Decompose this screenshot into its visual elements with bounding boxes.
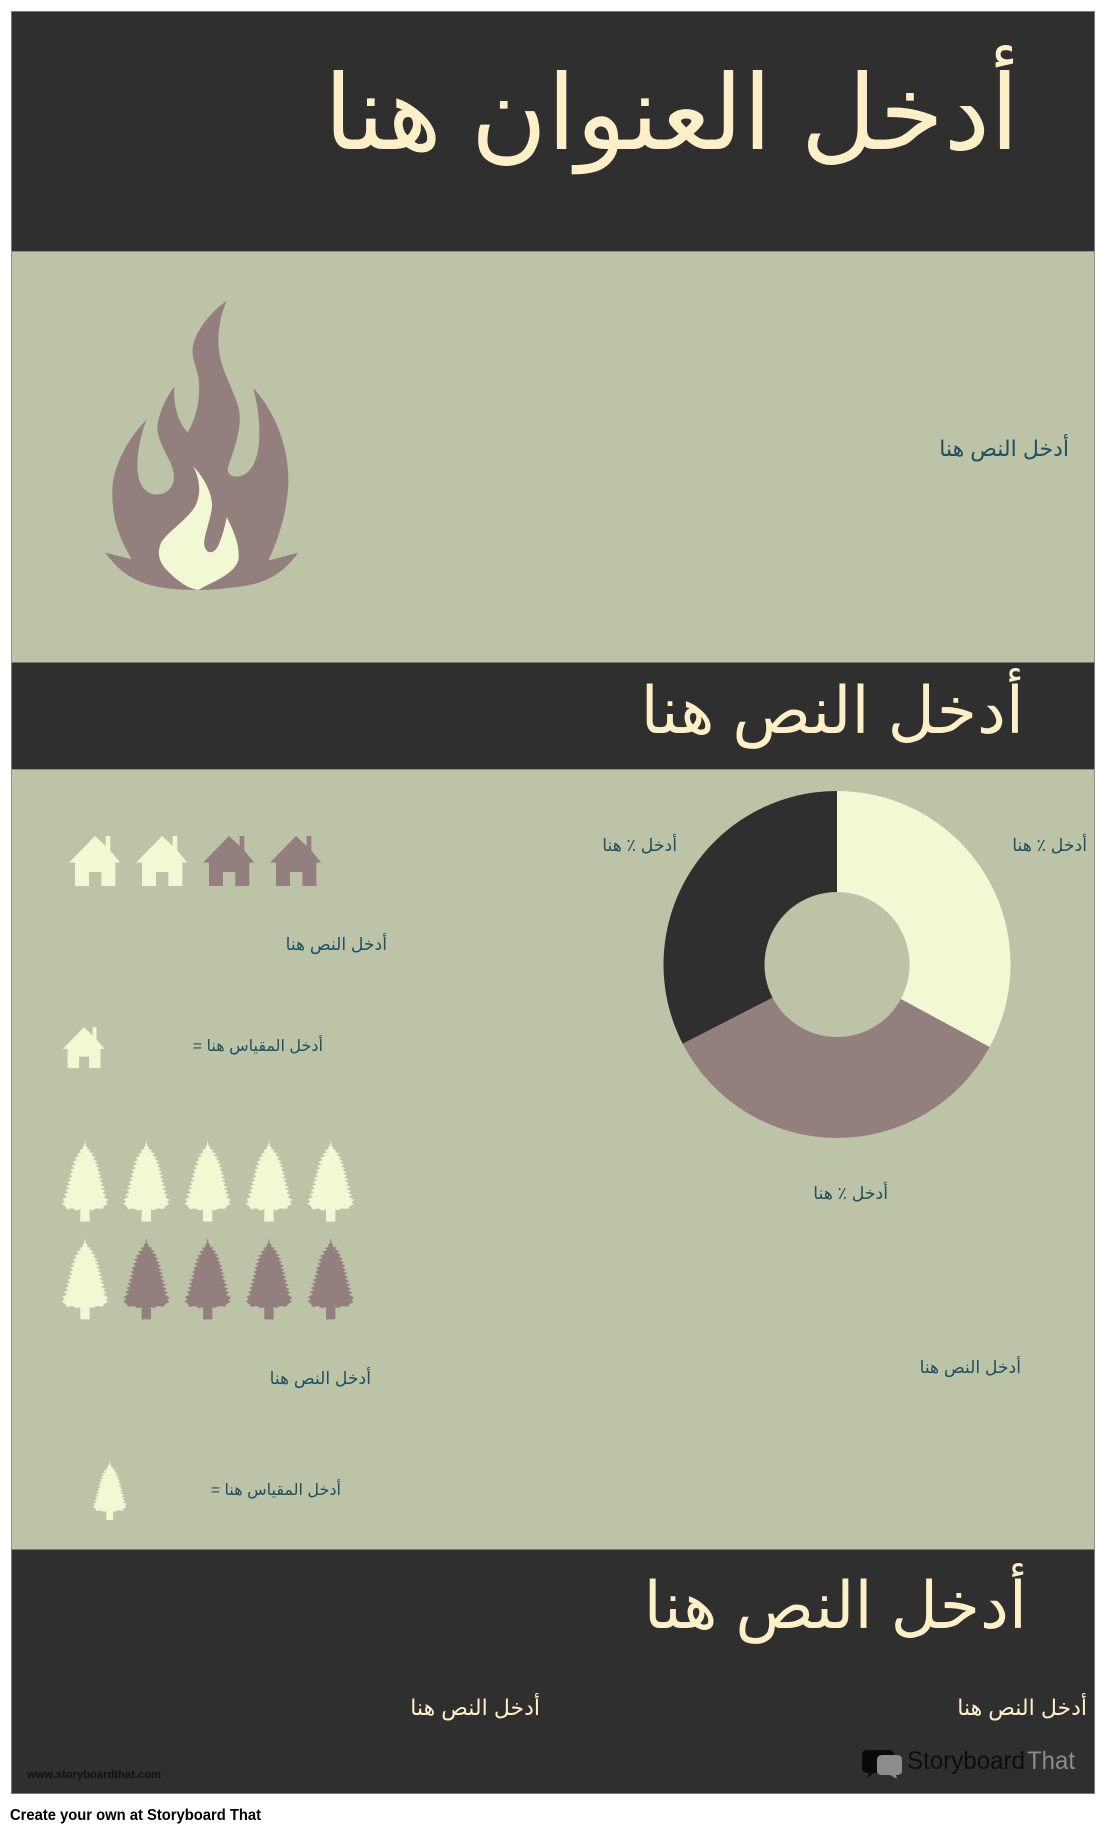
- text block: houses scale: أدخل المقياس هنا =: [193, 1035, 323, 1055]
- logo: Storyboard That: Storyboard: [907, 1747, 1025, 1775]
- footer credit: Create your own at Storyboard That: [10, 1807, 262, 1824]
- icon: house scale: [63, 1027, 105, 1068]
- text block: donut caption: أدخل النص هنا: [920, 1356, 1021, 1377]
- heading: conclusion: أدخل النص هنا: [644, 1563, 1027, 1644]
- heading: أدخل النص هنا: [641, 668, 1024, 749]
- panel: conclusion band: [12, 1550, 1094, 1794]
- text block: trees label: أدخل النص هنا: [270, 1367, 371, 1388]
- text block: houses label: أدخل النص هنا: [286, 933, 387, 954]
- text block: footer right: أدخل النص هنا: [957, 1693, 1087, 1721]
- icon: flame: [105, 301, 298, 590]
- label: donut right: أدخل ٪ هنا: [1012, 834, 1087, 855]
- label: donut left: أدخل ٪ هنا: [602, 834, 677, 855]
- label: donut bottom: أدخل ٪ هنا: [813, 1182, 888, 1203]
- text block: trees scale: أدخل المقياس هنا =: [211, 1479, 341, 1499]
- icon row: houses: [69, 836, 321, 886]
- donut chart: [664, 791, 1010, 1138]
- panel: section heading band: [12, 662, 1094, 770]
- logo: Storyboard That: [862, 1747, 1075, 1779]
- icon grid: trees: [62, 1140, 354, 1319]
- text block: fire section: أدخل النص هنا: [939, 434, 1069, 462]
- logo: Storyboard That: That: [1027, 1747, 1075, 1775]
- text block: footer left: أدخل النص هنا: [410, 1693, 540, 1721]
- panel: fire section: [12, 252, 1094, 662]
- icon: tree scale: [93, 1461, 127, 1520]
- title: أدخل العنوان هنا: [324, 45, 1019, 175]
- panel: statistics section: [12, 770, 1094, 1550]
- watermark url: www.storyboardthat.com: [26, 1769, 161, 1781]
- panel: title band: [12, 12, 1094, 252]
